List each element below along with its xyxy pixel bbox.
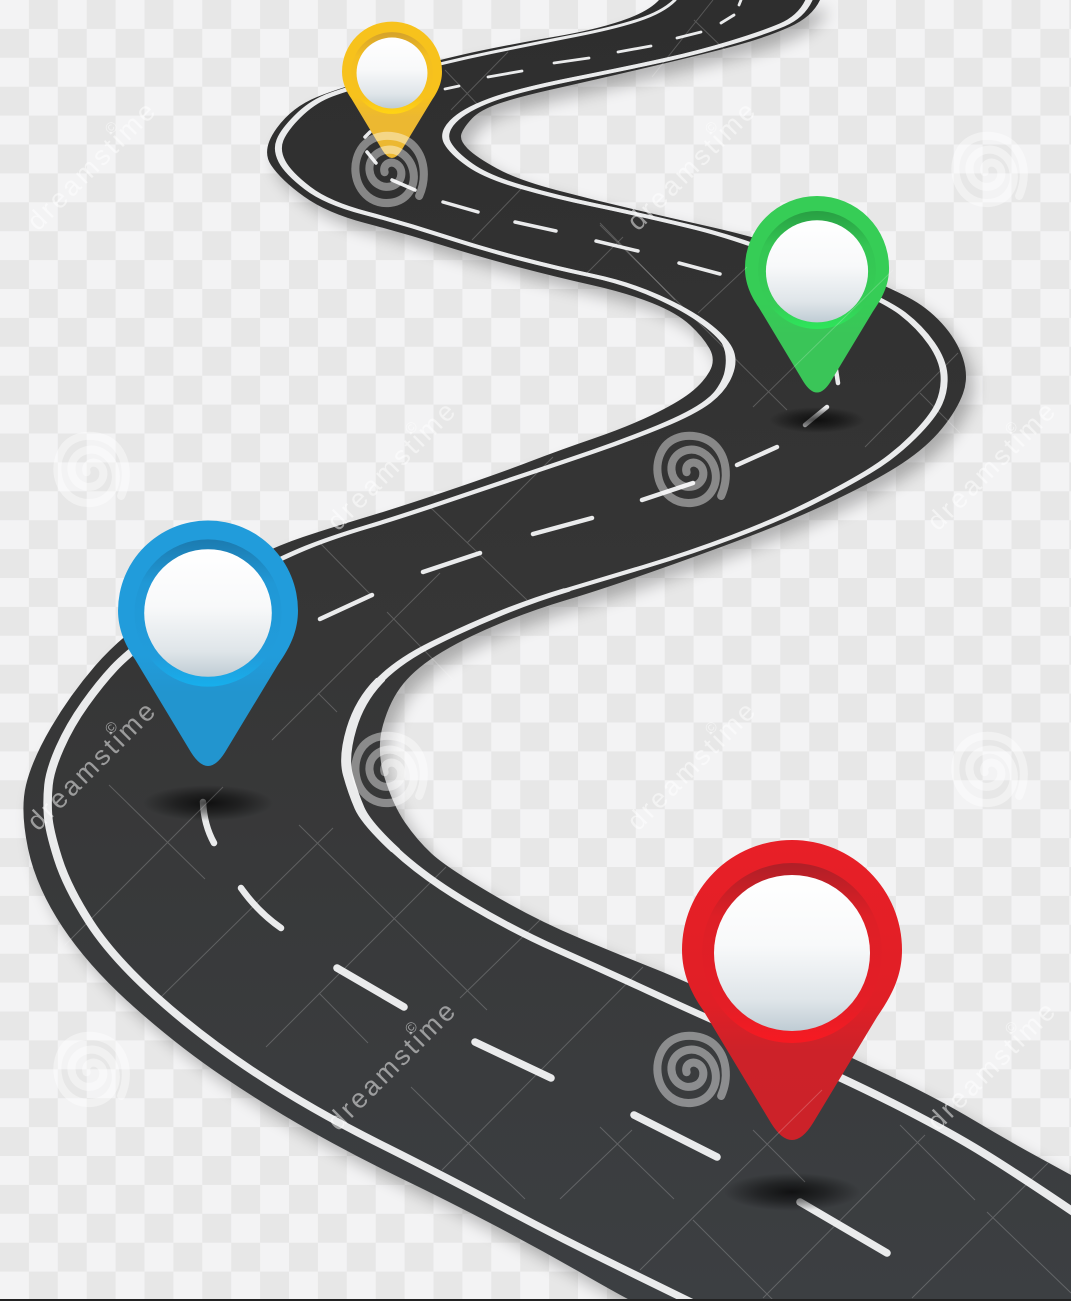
pin shadow: red bbox=[724, 1173, 860, 1211]
watermark text: dreamstime bbox=[21, 96, 161, 236]
upper edge white line bbox=[47, 0, 734, 1301]
watermark text: © bbox=[102, 718, 121, 738]
watermark text: dreamstime bbox=[621, 696, 761, 836]
pin: green bbox=[745, 196, 889, 392]
watermark text bbox=[17, 92, 1061, 1136]
watermark text: dreamstime bbox=[621, 96, 761, 236]
watermark text: © bbox=[402, 1018, 421, 1038]
watermark text: © bbox=[1002, 1018, 1021, 1038]
pin shadow: green bbox=[769, 407, 865, 433]
watermark text: © bbox=[402, 418, 421, 438]
watermark text: © bbox=[702, 718, 721, 738]
centre dashed line bbox=[203, 0, 887, 1253]
watermark text: © bbox=[102, 118, 121, 138]
watermark text: © bbox=[702, 118, 721, 138]
watermark text: dreamstime bbox=[921, 996, 1061, 1136]
pin: blue bbox=[118, 521, 298, 766]
pin shadow: blue bbox=[143, 785, 273, 821]
watermark text: dreamstime bbox=[21, 696, 161, 836]
watermark text: dreamstime bbox=[321, 996, 461, 1136]
lower edge white line bbox=[343, 0, 1071, 1213]
pin: yellow bbox=[342, 22, 442, 158]
watermark text: © bbox=[1002, 418, 1021, 438]
pin: red bbox=[682, 840, 902, 1140]
watermark text: dreamstime bbox=[321, 396, 461, 536]
watermark text: dreamstime bbox=[921, 396, 1061, 536]
watermark spirals bbox=[57, 136, 1024, 1103]
